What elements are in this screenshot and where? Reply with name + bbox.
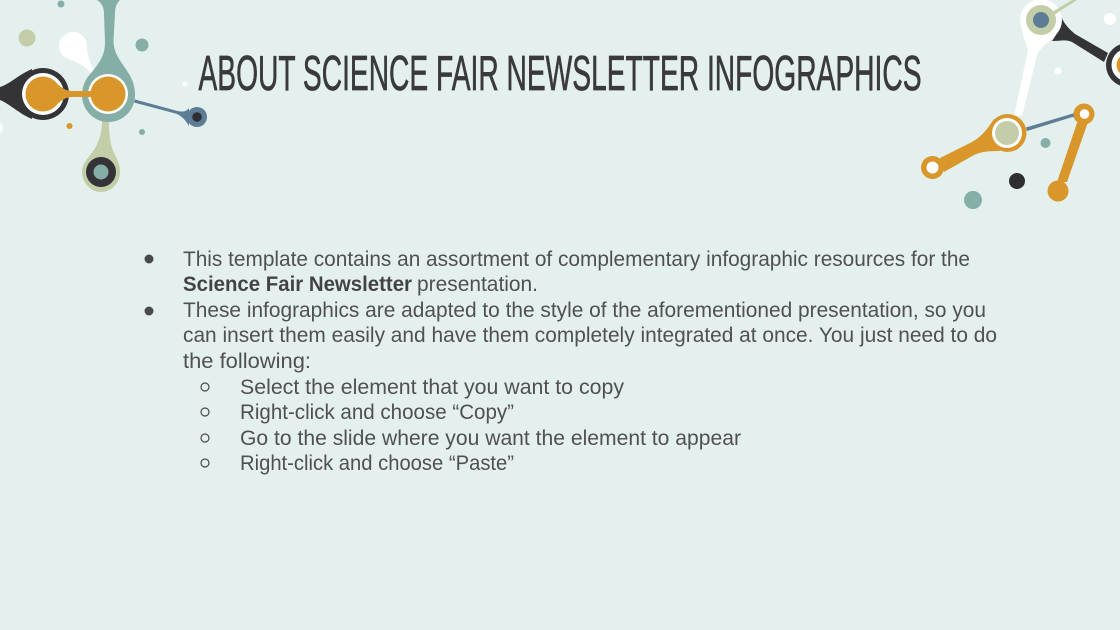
molecule decoration: top right: [921, 0, 1120, 209]
sub-steps: Select the element that you want to copy: [240, 376, 624, 399]
bullet list: [144, 248, 997, 475]
second bullet: [144, 299, 997, 373]
second bullet: These infographics are adapted to the style of the aforementioned presentation, so you: [183, 299, 986, 322]
sub-steps: Right-click and choose “Paste”: [240, 452, 514, 475]
first bullet: This template contains an assortment of complementary infographic resources for the: [183, 248, 970, 271]
second bullet: can insert them easily and have them completely integrated at once. You just need to do: [183, 324, 997, 347]
sub-steps: Right-click and choose “Copy”: [240, 401, 514, 424]
sub-steps: Go to the slide where you want the element to appear: [240, 427, 741, 450]
sub-steps: [201, 376, 741, 475]
first bullet: presentation.: [417, 273, 538, 296]
first bullet: [144, 248, 970, 296]
first bullet: Science Fair Newsletter: [183, 273, 412, 296]
second bullet: the following:: [183, 350, 311, 373]
molecule decoration: top left: [0, 0, 207, 192]
